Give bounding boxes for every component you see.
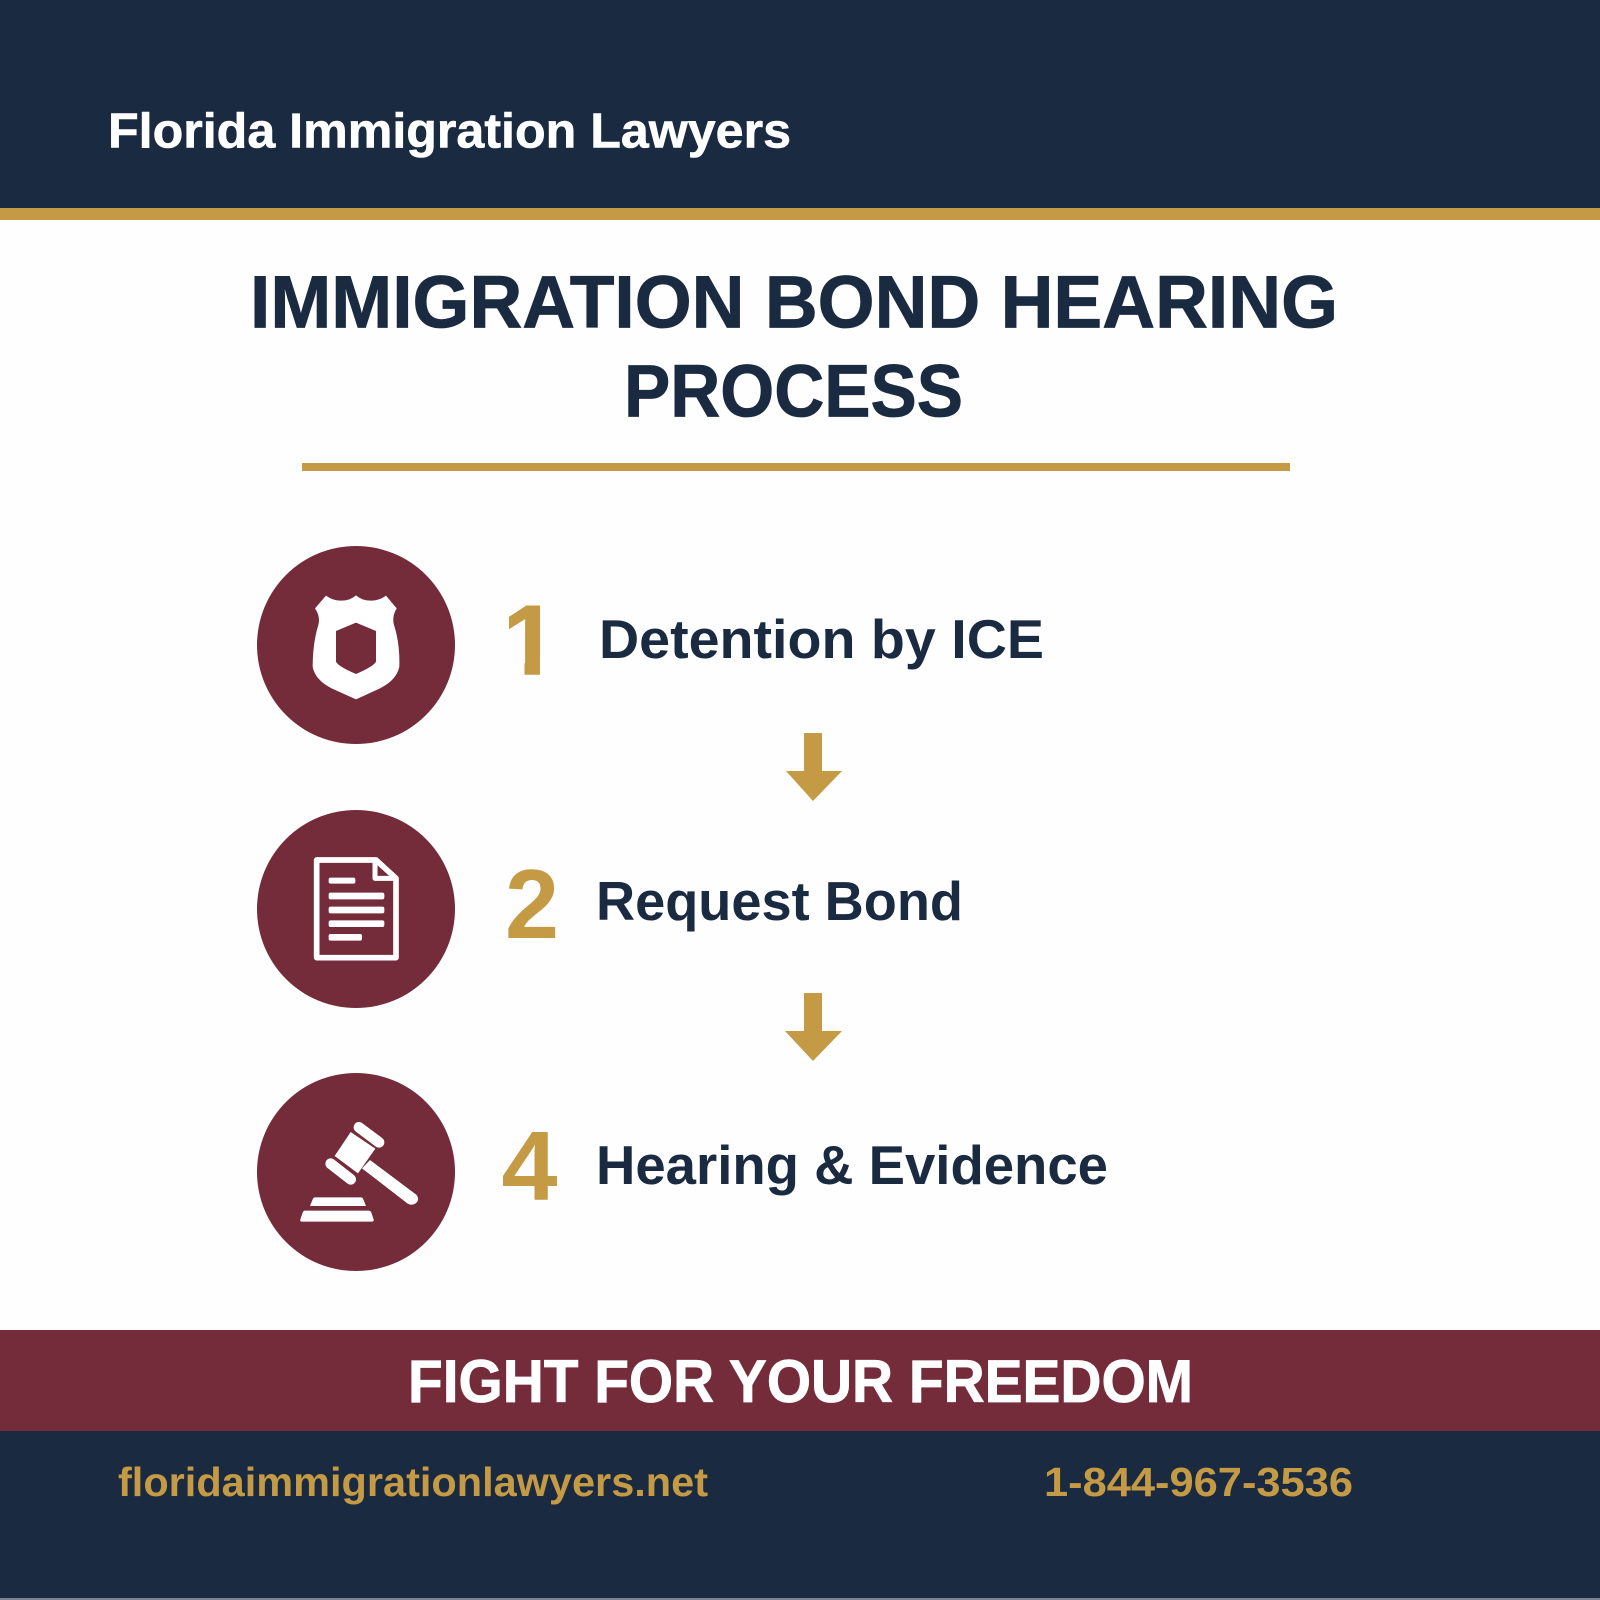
arrow 1 to 2 — [786, 733, 842, 801]
step number 1: 1 — [503, 585, 558, 695]
step 2: request bond — [257, 810, 963, 1008]
title divider — [302, 463, 1290, 471]
step label: Detention by ICE — [599, 608, 1044, 670]
step number 4: 4 — [502, 1111, 558, 1221]
step 3: hearing and evidence — [257, 1073, 1108, 1271]
step number 2: 2 — [505, 849, 559, 959]
title — [250, 260, 1338, 432]
title: IMMIGRATION BOND HEARING — [250, 260, 1338, 344]
firm name: Florida Immigration Lawyers — [108, 104, 791, 158]
phone: 1-844-967-3536 — [1044, 1459, 1353, 1505]
call-to-action banner: FIGHT FOR YOUR FREEDOM — [408, 1348, 1193, 1415]
footer — [0, 1431, 1600, 1600]
step label: Hearing & Evidence — [596, 1134, 1108, 1196]
icon: police badge — [257, 546, 455, 744]
step label: Request Bond — [596, 870, 963, 932]
arrow 2 to 3 — [785, 993, 842, 1061]
title: PROCESS — [624, 350, 963, 432]
step 1: detention by ICE — [257, 546, 1044, 744]
icon: document — [257, 810, 455, 1008]
header band — [0, 0, 1600, 220]
website: floridaimmigrationlawyers.net — [118, 1459, 708, 1505]
icon: gavel — [257, 1073, 455, 1271]
call-to-action banner — [0, 1330, 1600, 1431]
